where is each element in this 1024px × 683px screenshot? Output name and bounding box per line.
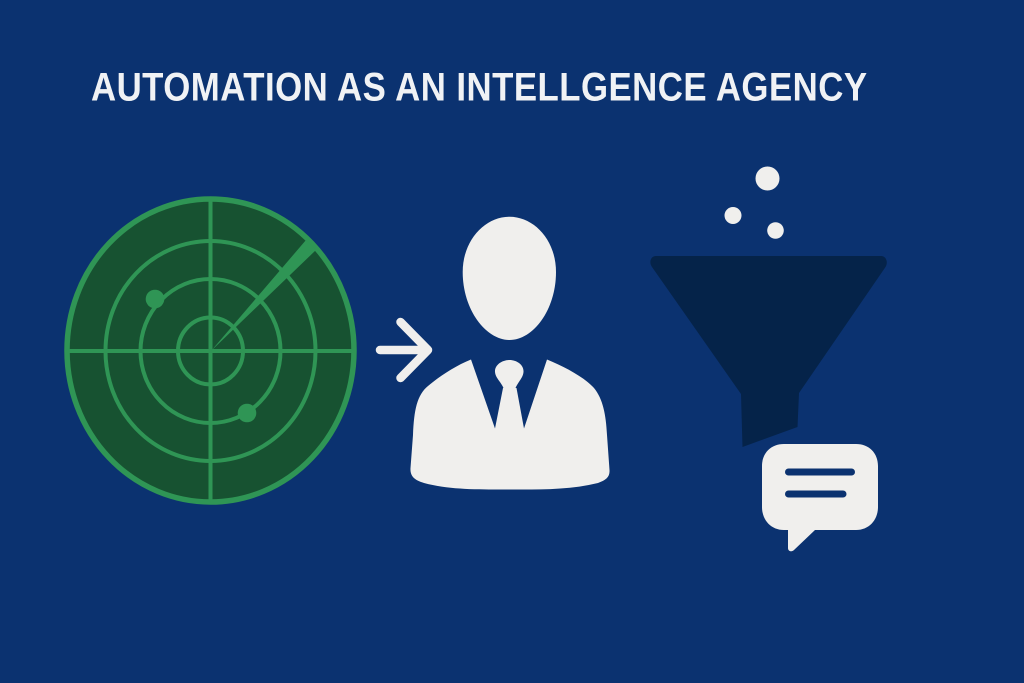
icon: speech bubble [762,444,878,551]
person head [463,217,556,340]
arrow [380,322,428,378]
icon: data dots [724,166,784,239]
radar sweep [211,240,316,351]
radar blip: lower right [238,404,256,422]
radar blip: upper left [146,290,164,308]
title: AUTOMATION AS AN INTELLGENCE AGENCY [91,64,867,109]
bubble text lines [788,472,852,494]
icon: funnel [650,256,887,447]
person tie knot [495,360,524,388]
person body [410,360,610,490]
icon: person in suit [410,217,610,490]
icon: radar [66,198,355,503]
